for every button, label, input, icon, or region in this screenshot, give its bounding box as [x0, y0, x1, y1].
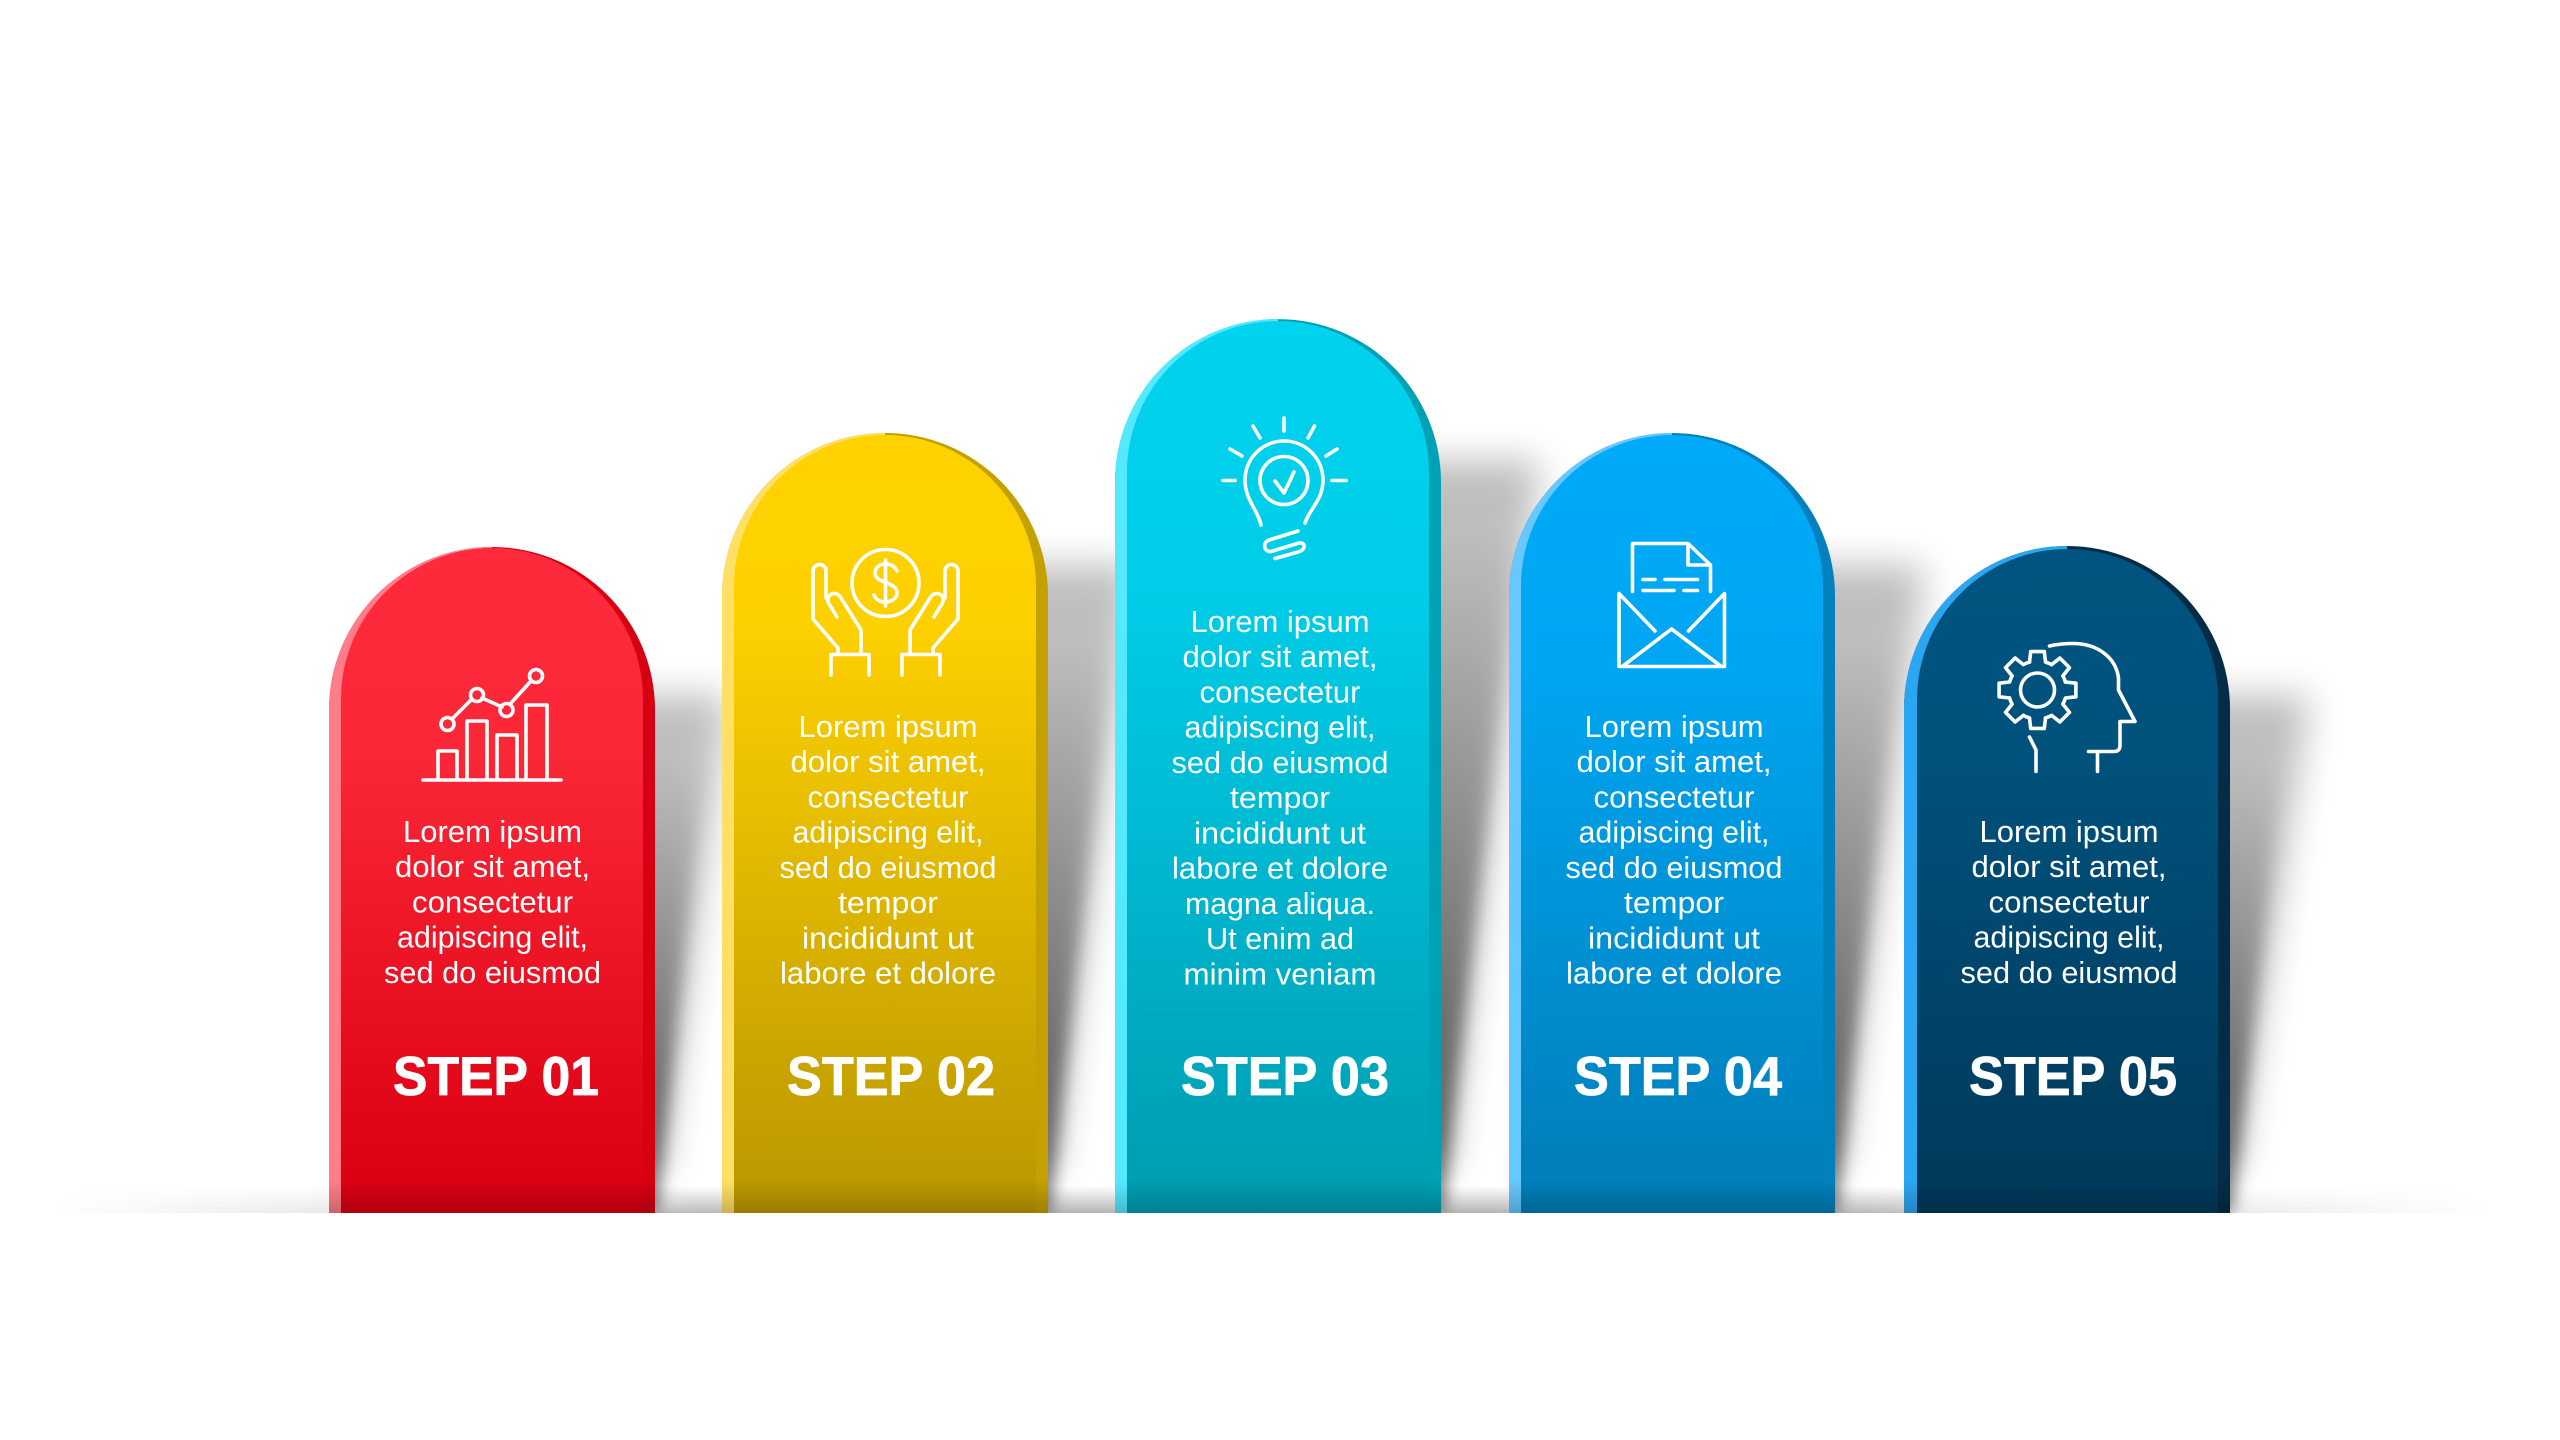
icon: bar chart — [423, 670, 561, 780]
text: step 04 body: adipiscing elit, — [1578, 816, 1770, 850]
text: step 02 body: sed do eiusmod — [780, 851, 996, 885]
text: step 04 body: consectetur — [1594, 780, 1754, 814]
text: step 05 body: consectetur — [1988, 886, 2150, 920]
text: step 03 body: incididunt ut — [1194, 816, 1367, 850]
text: step 03 body: dolor sit amet, — [1182, 640, 1378, 674]
text: step 02 body: tempor — [838, 886, 938, 920]
panel: step 01 — [329, 547, 655, 1213]
text: step 01 body — [384, 815, 601, 990]
text: step 03 body: Lorem ipsum — [1190, 605, 1370, 639]
text: step 03 body: adipiscing elit, — [1184, 710, 1376, 744]
icon: head with gear — [1999, 644, 2135, 772]
floor shadow — [154, 1189, 2378, 1213]
text: step 03 body: magna aliqua. — [1185, 887, 1375, 921]
text: step 03 body: tempor — [1230, 781, 1330, 815]
text: step 03 body: sed do eiusmod — [1172, 746, 1388, 780]
text: step 03 body — [1172, 605, 1388, 992]
text: step 05 body: dolor sit amet, — [1972, 850, 2166, 884]
text: step 04 body: tempor — [1624, 886, 1724, 920]
icon: envelope with letter — [1619, 544, 1724, 666]
text: step 02 body: dolor sit amet, — [790, 745, 986, 779]
heading: step 03: STEP 03 — [1181, 1045, 1389, 1107]
heading: step 05: STEP 05 — [1969, 1045, 2177, 1107]
text: step 01 body: dolor sit amet, — [395, 850, 590, 884]
text: step 04 body — [1566, 710, 1782, 990]
icon: hands holding coin — [813, 550, 958, 675]
panel: step 04 — [1509, 433, 1835, 1213]
text: step 02 body: adipiscing elit, — [792, 816, 984, 850]
text: step 02 body: Lorem ipsum — [798, 710, 978, 744]
text: step 02 body: consectetur — [808, 780, 968, 814]
text: step 04 body: incididunt ut — [1588, 922, 1761, 956]
text: step 03 body: Ut enim ad — [1206, 922, 1354, 956]
text: step 04 body: sed do eiusmod — [1566, 851, 1782, 885]
icon: light bulb with check — [1223, 418, 1346, 558]
text: step 05 body: adipiscing elit, — [1974, 920, 2164, 954]
text: step 03 body: labore et dolore — [1172, 852, 1388, 886]
text: step 01 body: Lorem ipsum — [403, 815, 582, 849]
heading: step 02: STEP 02 — [787, 1045, 995, 1107]
text: step 04 body: Lorem ipsum — [1584, 710, 1764, 744]
text: step 05 body: Lorem ipsum — [1980, 815, 2158, 849]
text: step 04 body: labore et dolore — [1566, 956, 1782, 990]
text: step 04 body: dolor sit amet, — [1576, 745, 1772, 779]
panel: step 05 — [1904, 546, 2230, 1213]
text: step 02 body — [780, 710, 996, 990]
heading: step 04: STEP 04 — [1574, 1045, 1782, 1107]
text: step 03 body: consectetur — [1200, 676, 1360, 710]
text: step 03 body: minim veniam — [1184, 958, 1376, 992]
text: step 01 body: consectetur — [412, 886, 573, 920]
panel: step 03 — [1115, 319, 1441, 1213]
text: step 01 body: adipiscing elit, — [397, 920, 588, 954]
text: step 02 body: incididunt ut — [802, 922, 975, 956]
panel: step 02 — [722, 433, 1048, 1213]
text: step 05 body: sed do eiusmod — [1960, 956, 2178, 990]
text: step 02 body: labore et dolore — [780, 956, 996, 990]
text: step 01 body: sed do eiusmod — [384, 956, 601, 990]
heading: step 01: STEP 01 — [393, 1045, 599, 1107]
text: step 05 body — [1960, 815, 2178, 990]
card cast shadows — [500, 460, 2310, 1213]
